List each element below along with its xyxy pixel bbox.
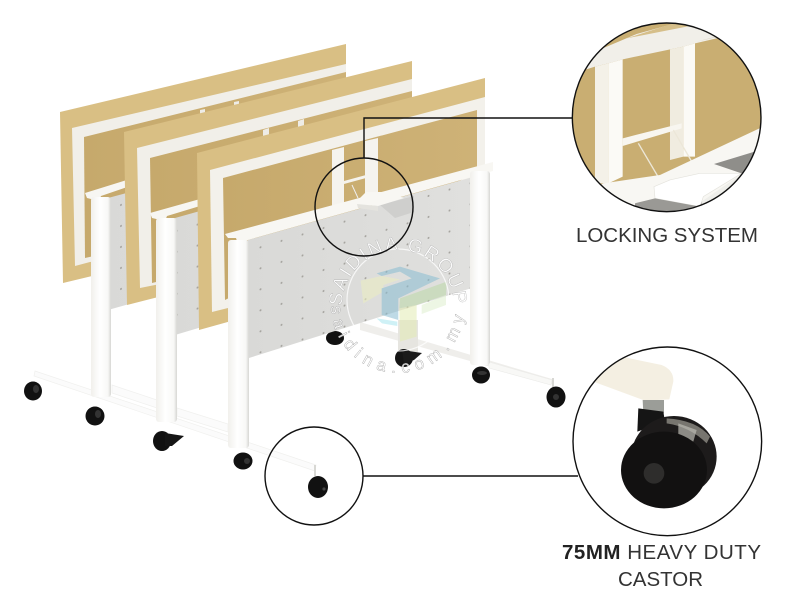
caster: rear row 2 bbox=[395, 349, 422, 367]
wood background bbox=[573, 24, 760, 184]
wood inner bbox=[84, 72, 346, 258]
lock posts bbox=[332, 138, 378, 208]
castor circle outline bbox=[573, 347, 762, 536]
locking latch bbox=[357, 192, 414, 218]
white frame bbox=[137, 79, 412, 288]
support rail bbox=[85, 179, 130, 201]
castor bracket bbox=[637, 408, 665, 432]
right posts bbox=[670, 47, 683, 160]
white frame bbox=[210, 97, 485, 312]
wood top bbox=[60, 44, 346, 283]
table: back bbox=[60, 44, 346, 397]
watermark brand text: SAIDINA GROUP bbox=[329, 237, 467, 305]
front rail bbox=[601, 128, 760, 206]
foot beam: front bbox=[34, 371, 316, 471]
watermark url text: saidina.com.my bbox=[330, 306, 466, 373]
left leg bbox=[228, 240, 249, 448]
foot beam: rear bbox=[360, 320, 552, 385]
foot beams and casters bbox=[24, 320, 566, 498]
label: locking system: LOCKING SYSTEM bbox=[576, 224, 758, 247]
wood top bbox=[124, 61, 412, 305]
modesty panel bbox=[175, 155, 400, 335]
label: castor: 75MM HEAVY DUTY bbox=[562, 541, 761, 564]
leg bbox=[156, 218, 177, 422]
modesty panel bbox=[248, 177, 475, 358]
wheel hub bbox=[644, 463, 664, 484]
caster: rear row 3 bbox=[472, 366, 490, 384]
castor arm bbox=[593, 357, 673, 401]
caster: highlighted bbox=[308, 465, 328, 498]
caster: front row 3 bbox=[153, 431, 184, 451]
wheel tread bbox=[634, 416, 717, 488]
label: castor: CASTOR bbox=[618, 568, 703, 591]
focus ring: castor bbox=[265, 427, 363, 525]
caster: rear row 4 bbox=[546, 378, 566, 408]
table: middle bbox=[124, 61, 412, 422]
wood top bbox=[197, 78, 485, 330]
caster: rear row 1 bbox=[326, 331, 344, 345]
leg bbox=[91, 197, 111, 397]
castor stem bbox=[643, 400, 664, 413]
support rail bbox=[150, 199, 200, 221]
latch block bbox=[654, 173, 742, 207]
watermark bbox=[329, 237, 467, 373]
under shade bbox=[635, 198, 702, 211]
left posts bbox=[595, 63, 608, 183]
right leg bbox=[470, 171, 490, 365]
table: front bbox=[197, 78, 493, 448]
wheel face bbox=[621, 432, 707, 508]
lock circle outline bbox=[572, 23, 761, 212]
white frame bbox=[72, 64, 346, 266]
modesty panel bbox=[108, 135, 340, 310]
top frame band bbox=[586, 25, 717, 70]
wood inner bbox=[223, 110, 477, 300]
caster: front row 4 bbox=[234, 452, 252, 470]
connector: castor bbox=[363, 475, 578, 477]
caster: front row 2 bbox=[86, 406, 104, 426]
focus ring: lock bbox=[315, 158, 413, 256]
lock wires bbox=[638, 130, 692, 176]
caster: front row 1 bbox=[24, 382, 42, 400]
watermark ring bbox=[347, 249, 449, 351]
wood inner bbox=[150, 91, 412, 283]
crossbar bbox=[623, 123, 682, 146]
callout: locking system detail bbox=[570, 20, 767, 223]
connector: locking system bbox=[364, 118, 572, 158]
watermark logo bbox=[361, 267, 447, 342]
label: castor bbox=[562, 541, 761, 591]
right shade bbox=[714, 152, 754, 173]
callout: castor detail bbox=[573, 347, 762, 536]
support rail bbox=[225, 162, 493, 244]
